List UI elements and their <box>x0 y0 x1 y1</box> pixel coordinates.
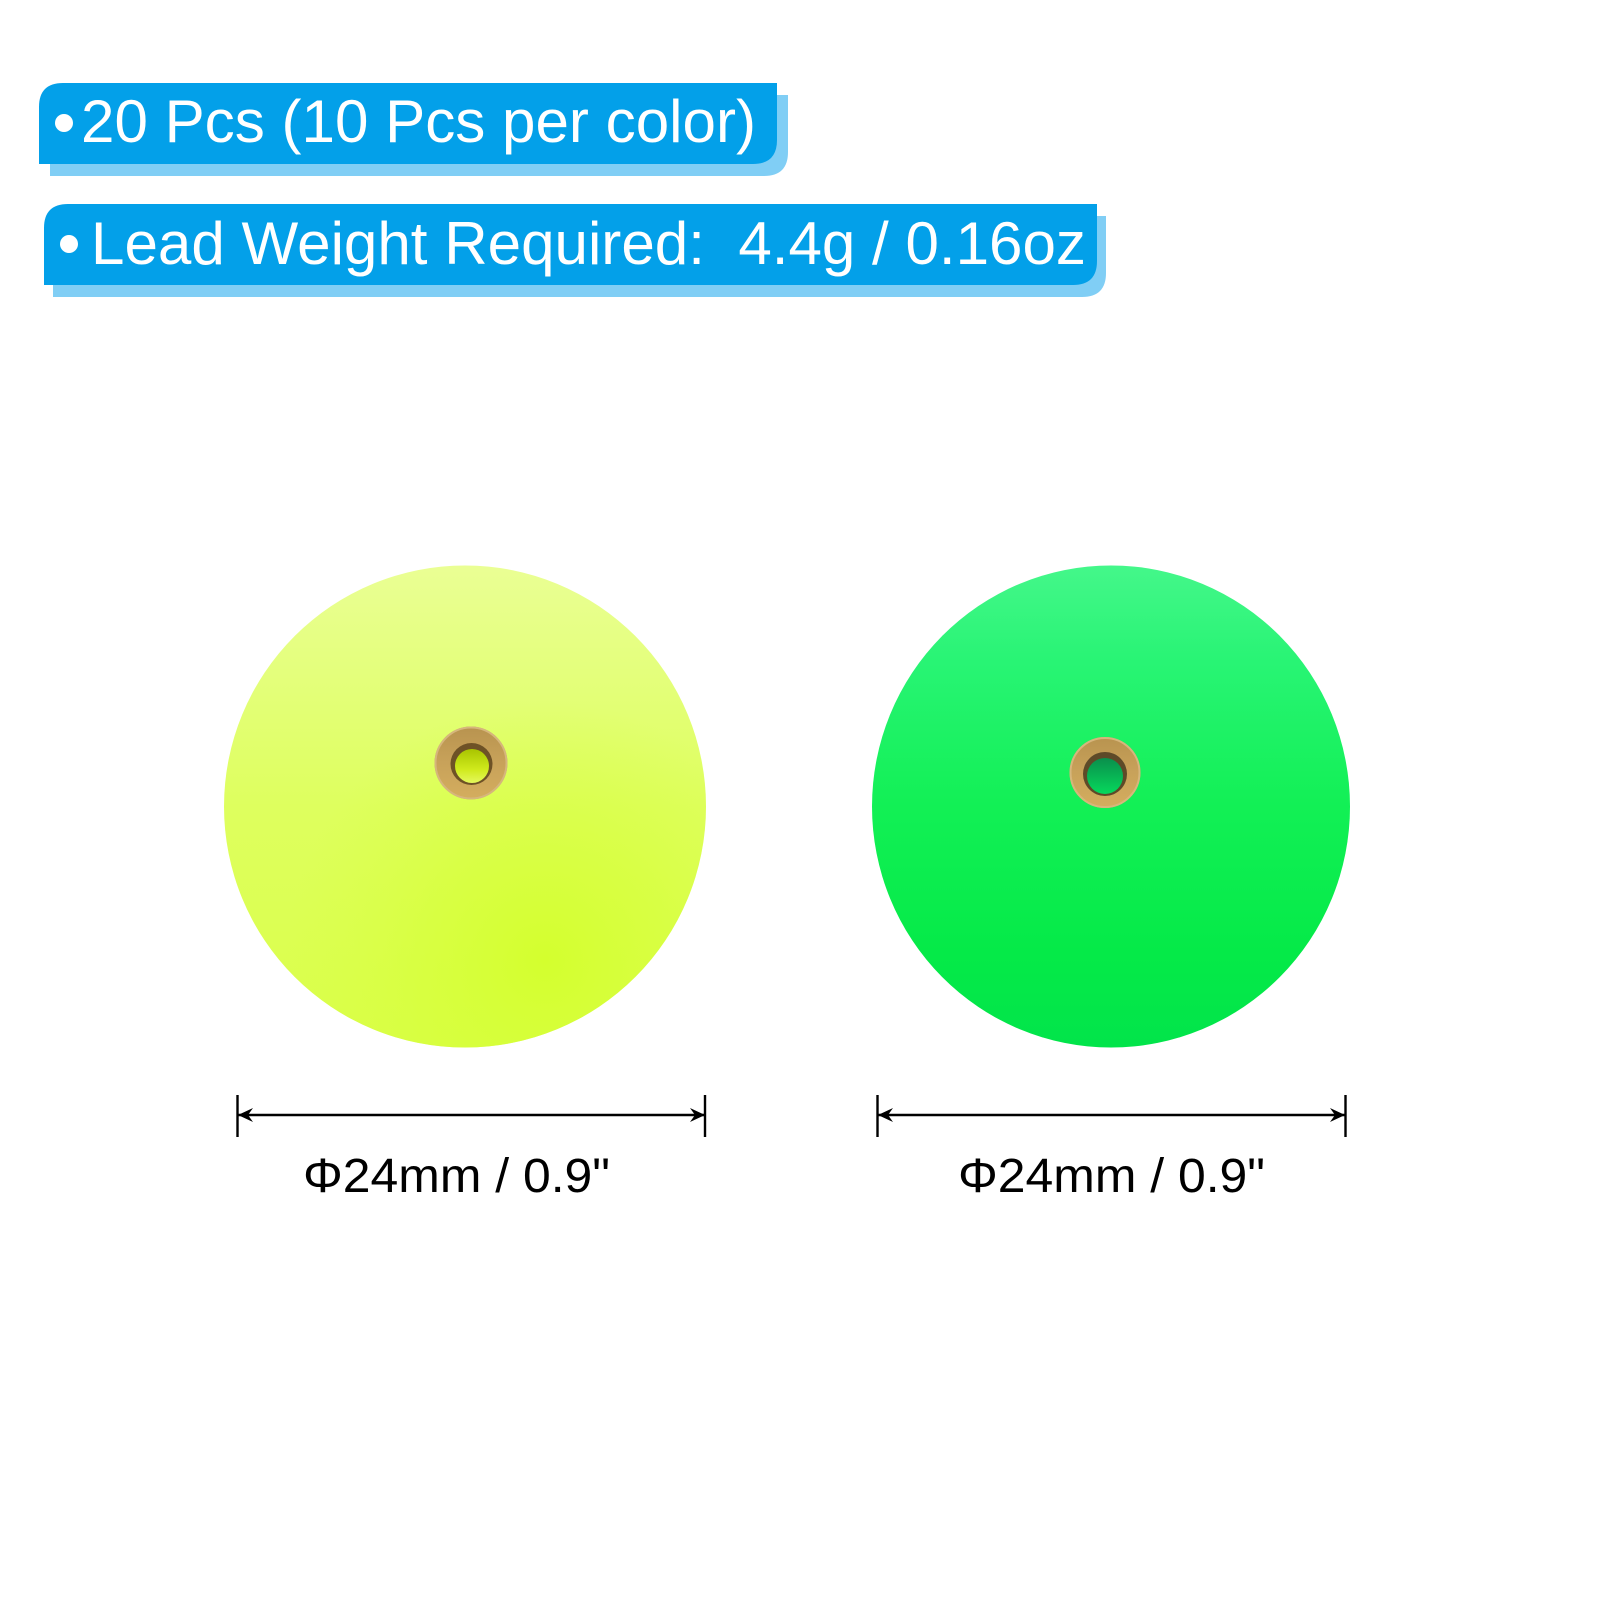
bar shadow <box>50 95 788 176</box>
dimension line with arrows <box>238 1095 705 1137</box>
pieces text: 20 Pcs (10 Pcs per color) <box>81 88 756 155</box>
icon: green ball brass grommet <box>1070 737 1140 808</box>
callout: pieces count <box>39 83 788 176</box>
bar shadow <box>53 216 1106 297</box>
dimension: green ball diameter <box>878 1095 1346 1203</box>
bar <box>39 83 777 164</box>
callout: lead weight <box>44 204 1106 297</box>
bullet <box>60 235 78 253</box>
icon: yellow ball brass grommet <box>434 726 508 800</box>
lead weight text: Lead Weight Required: 4.4g / 0.16oz <box>91 210 1086 277</box>
yellow float ball <box>224 566 706 1048</box>
dimension line with arrows <box>878 1095 1346 1137</box>
green float ball <box>872 566 1350 1048</box>
bar <box>44 204 1097 285</box>
dimension: yellow ball diameter <box>238 1095 705 1203</box>
diameter label: Φ24mm / 0.9" <box>303 1150 610 1203</box>
diameter label: Φ24mm / 0.9" <box>958 1150 1265 1203</box>
bullet <box>55 114 73 132</box>
